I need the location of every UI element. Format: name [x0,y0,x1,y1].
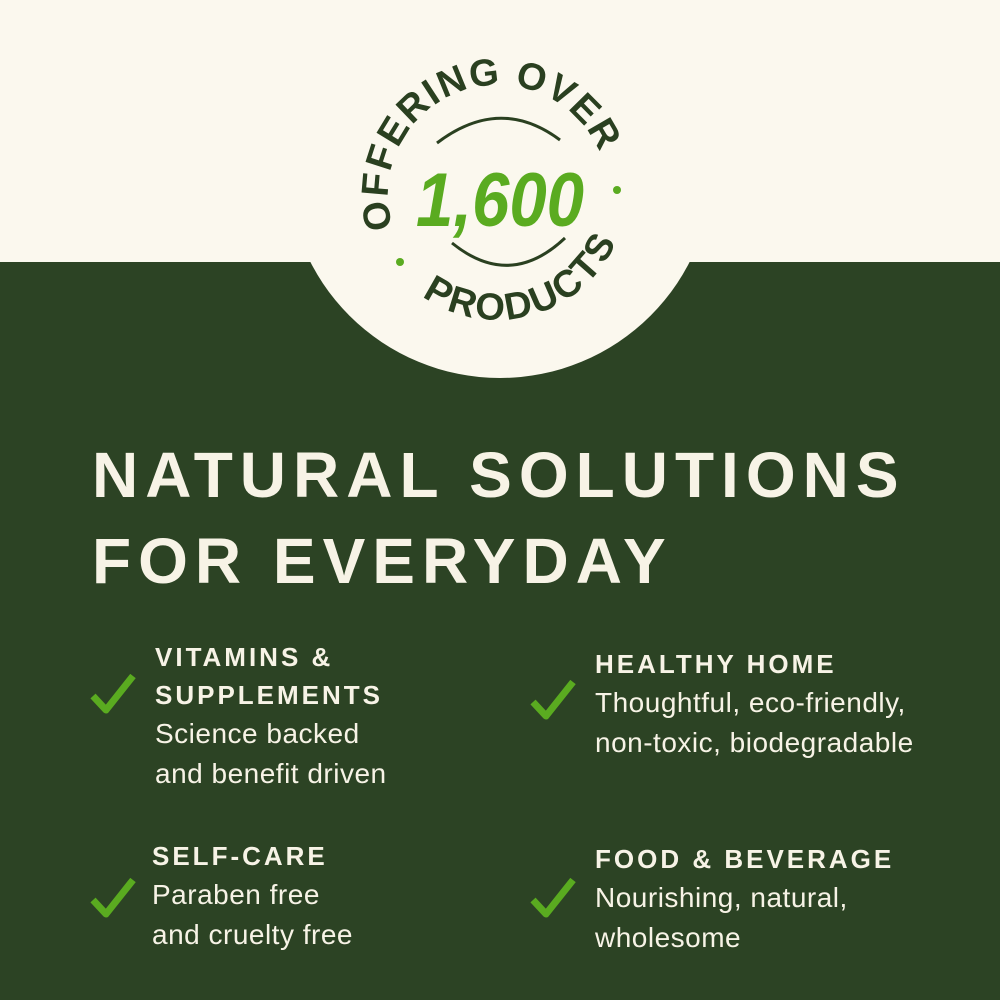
icon: check [90,878,136,918]
item: vitamins: SUPPLEMENTS [155,680,383,710]
item: food: wholesome [595,922,741,953]
icon: check [90,674,136,714]
number: 1,600 [416,158,584,243]
item: healthy home: Thoughtful, eco-friendly, [595,687,906,718]
item: food [595,844,894,953]
item: food: FOOD & BEVERAGE [595,844,894,874]
badge: offering over 1,600 products [310,59,690,378]
item: healthy home: HEALTHY HOME [595,649,837,679]
icon: check [530,680,576,720]
item: vitamins [155,642,387,789]
item: self-care: Paraben free [152,879,320,910]
text: FOR EVERYDAY [92,525,673,597]
item: healthy home: non-toxic, biodegradable [595,727,914,758]
item: self-care [152,841,353,950]
item: vitamins: Science backed [155,718,360,749]
item: self-care: SELF-CARE [152,841,328,871]
cream top background [0,0,1000,262]
icon: check [530,878,576,918]
ring text bottom: PRODUCTS [424,234,613,320]
item: vitamins: VITAMINS & [155,642,333,672]
item: self-care: and cruelty free [152,919,353,950]
inner arcs [437,118,560,143]
ring text top: OFFERING OVER [362,59,619,230]
item: food: Nourishing, natural, [595,882,848,913]
title: NATURAL SOLUTIONS [92,439,906,511]
dots [396,258,404,266]
item: vitamins: and benefit driven [155,758,387,789]
item: healthy home [595,649,914,758]
